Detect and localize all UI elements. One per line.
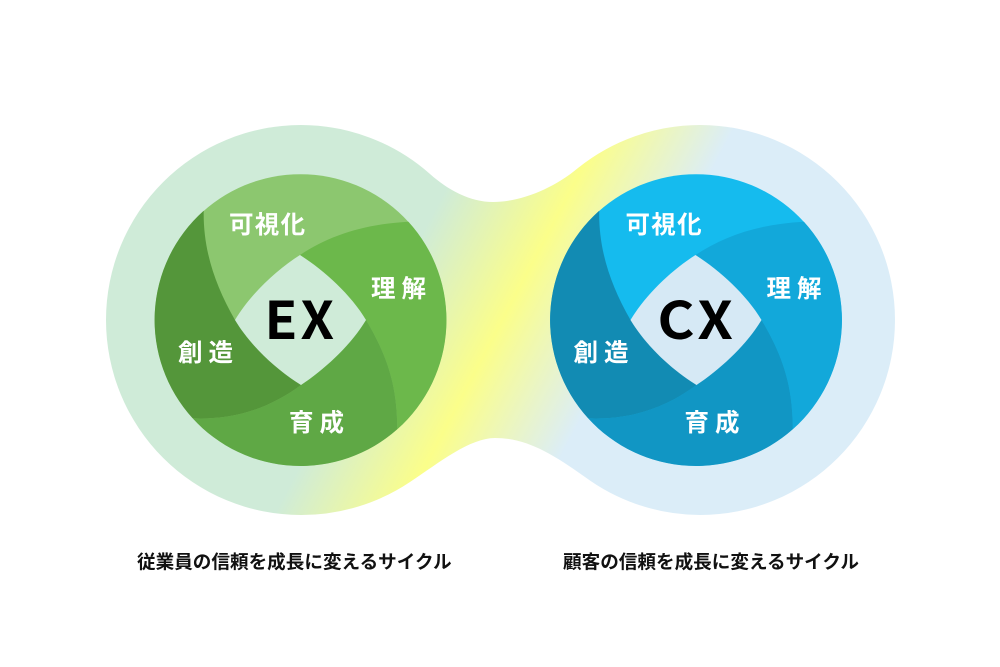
label: 理解: 理解: [371, 270, 432, 305]
label: 育成: 育成: [289, 404, 350, 439]
center diamond: [235, 255, 366, 385]
segment: 可視化: [550, 174, 842, 466]
panel: EX cycle: [155, 174, 446, 466]
label: 可視化: 可視化: [229, 206, 306, 241]
center diamond: [630, 255, 762, 385]
caption: EX: 従業員の信頼を成長に変えるサイクル: [137, 548, 452, 574]
segment: 理解: [696, 222, 842, 429]
segment: 可視化: [155, 174, 446, 466]
label: 育成: 育成: [684, 404, 746, 439]
segment: 創造: [550, 211, 696, 418]
segment: 育成: [588, 320, 793, 466]
label: 理解: 理解: [766, 270, 828, 305]
caption: CX: 顧客の信頼を成長に変えるサイクル: [563, 548, 859, 574]
panel: CX cycle: [550, 174, 842, 466]
label: 創造: 創造: [574, 334, 634, 369]
segment: 育成: [193, 320, 397, 466]
label: CX: CX: [657, 279, 736, 354]
segment: 理解: [300, 222, 446, 429]
background: linked double-circle shape: [106, 125, 895, 515]
label: 創造: 創造: [178, 334, 239, 369]
segment: 創造: [155, 211, 301, 418]
label: 可視化: 可視化: [626, 206, 703, 241]
label: EX: EX: [264, 280, 337, 355]
